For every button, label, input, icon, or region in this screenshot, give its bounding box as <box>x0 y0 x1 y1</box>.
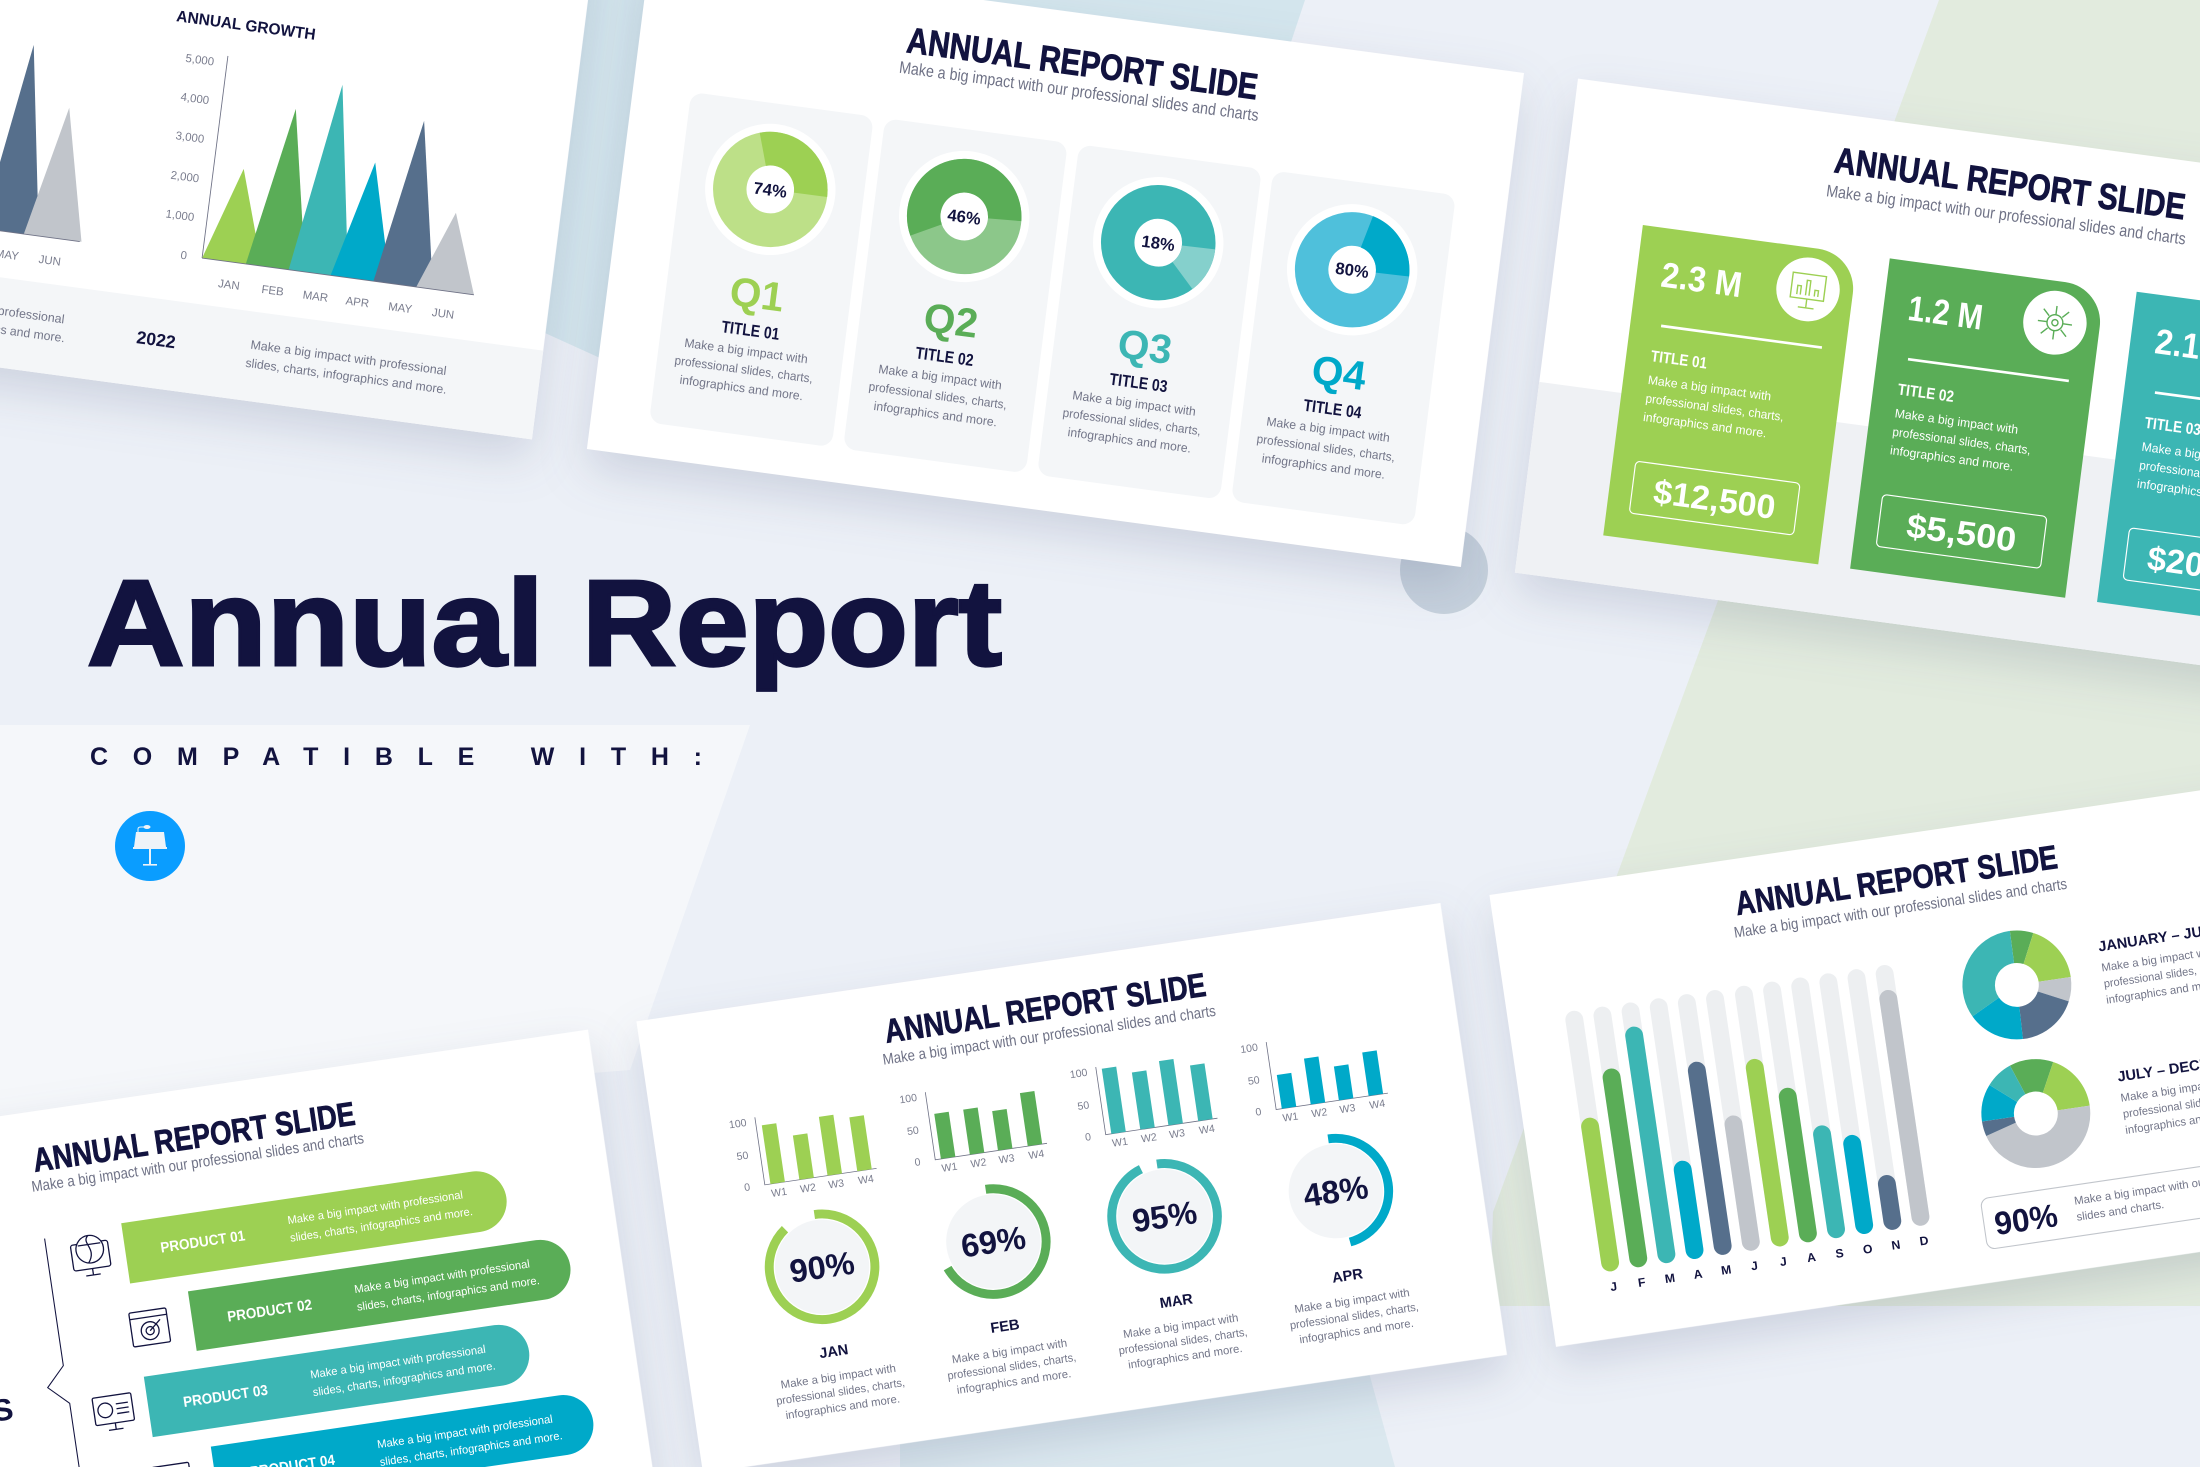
column: FEB: infographics and more. <box>956 1368 1072 1397</box>
chart: right area chart: 1,000 <box>165 208 195 224</box>
card: Q1: infographics and more. <box>679 373 804 403</box>
card: 1.2 M: professional slides, charts, <box>1892 425 2031 457</box>
column: MAR: 0 <box>1084 1131 1092 1144</box>
column: MAR: 95% <box>1130 1194 1200 1239</box>
column: JAN: 90% <box>787 1245 857 1290</box>
text: july to december <box>2116 1050 2200 1137</box>
chart: right area chart: 3,000 <box>175 130 205 146</box>
bracket line <box>26 1238 90 1467</box>
card: 2.1 M <box>2097 292 2200 631</box>
bar: product 03 <box>144 1321 533 1437</box>
column: MAR: MAR <box>1159 1291 1194 1312</box>
card: Q3: professional slides, charts, <box>1062 406 1202 438</box>
slide: annual growth area chart <box>0 0 595 439</box>
card: Q1: Make a big impact with <box>684 336 809 366</box>
column: APR: 0 <box>1255 1106 1262 1119</box>
card: Q2 <box>843 118 1068 473</box>
callout: 90 percent: 90% <box>1992 1197 2060 1242</box>
column: APR: APR <box>1331 1266 1364 1287</box>
slide: product list <box>0 1030 655 1467</box>
column: FEB: Make a big impact with <box>951 1338 1068 1366</box>
icon: network <box>2036 304 2074 342</box>
card: Q4: Q4 <box>1309 346 1369 399</box>
column: APR: W4 <box>1369 1098 1386 1112</box>
column: MAR: professional slides, charts, <box>1118 1327 1248 1357</box>
slide heading: ANNUAL REPORT SLIDE <box>882 967 1208 1051</box>
bar: product 03: PRODUCT 03 <box>182 1383 269 1411</box>
bar: product 02: PRODUCT 02 <box>226 1297 313 1326</box>
column: JAN: W1 <box>770 1186 788 1200</box>
icon: presentation monitor <box>92 1393 136 1432</box>
chart: right area chart: 5,000 <box>185 53 215 69</box>
card: Q4: Make a big impact with <box>1266 414 1391 445</box>
callout: 90 percent <box>1980 1152 2200 1250</box>
slide: yearly bars and donuts <box>1489 777 2200 1347</box>
bar: product 03: Make a big impact with professional <box>310 1344 487 1381</box>
main title: Report <box>582 555 1002 691</box>
column: FEB: W3 <box>998 1152 1015 1166</box>
chart: left area chart <box>0 35 105 271</box>
column: APR: W1 <box>1282 1110 1299 1125</box>
chart: monthly rounded bars: A <box>1693 1267 1704 1282</box>
card: Q3: TITLE 03 <box>1109 370 1169 396</box>
card: 1.2 M: 1.2 M <box>1906 289 1985 338</box>
chart: right area chart: 0 <box>180 250 188 263</box>
card: Q4: infographics and more. <box>1261 451 1386 482</box>
column: JAN: professional slides, charts, <box>775 1377 906 1408</box>
column: APR: professional slides, charts, <box>1289 1301 1420 1332</box>
card: 1.2 M: Make a big impact with <box>1894 406 2019 437</box>
chart: monthly rounded bars: F <box>1637 1275 1647 1290</box>
card: Q4 <box>1231 171 1456 526</box>
bar: product 02: slides, charts, infographics and more. <box>356 1275 540 1314</box>
column: APR: Make a big impact with <box>1294 1287 1410 1316</box>
column: APR: W2 <box>1311 1106 1328 1120</box>
slide: monthly progress <box>636 903 1507 1467</box>
chart: monthly rounded bars: O <box>1862 1242 1873 1257</box>
slide heading: ANNUAL REPORT SLIDE <box>905 19 1260 107</box>
chart: monthly rounded bars: J <box>1750 1259 1759 1273</box>
column: FEB: 50 <box>906 1124 920 1138</box>
bar: product 04 <box>211 1391 597 1467</box>
card: 2.3 M: TITLE 01 <box>1650 348 1708 373</box>
column: JAN: Make a big impact with <box>780 1363 897 1392</box>
slide heading: ANNUAL REPORT SLIDE <box>31 1096 358 1180</box>
card: 2.3 M: professional slides, charts, <box>1645 391 1785 424</box>
column: MAR: W3 <box>1168 1127 1186 1141</box>
column: APR <box>1240 1024 1423 1349</box>
main title <box>87 555 1002 691</box>
card: Q1: professional slides, charts, <box>674 353 814 386</box>
column: JAN: 0 <box>743 1181 751 1194</box>
card: 1.2 M <box>1850 258 2105 598</box>
footer text: left <box>0 286 68 345</box>
donut: january to june <box>1959 927 2075 1043</box>
column: APR: infographics and more. <box>1299 1318 1415 1346</box>
card: 1.2 M: TITLE 02 <box>1897 382 1955 406</box>
column: FEB: professional slides, charts, <box>947 1352 1077 1383</box>
card: 1.2 M: infographics and more. <box>1889 443 2014 474</box>
slide heading: ANNUAL REPORT SLIDE <box>1733 839 2060 923</box>
bar: product 01: slides, charts, infographics and more. <box>289 1206 474 1245</box>
chart: right area chart: MAY <box>387 301 413 316</box>
column: FEB: W4 <box>1028 1148 1045 1162</box>
slide heading <box>25 1095 365 1196</box>
icon: globe monitor <box>69 1233 112 1278</box>
card: Q2: Make a big impact with <box>878 362 1003 393</box>
card: Q2: infographics and more. <box>873 399 998 429</box>
column: FEB: 0 <box>914 1156 922 1169</box>
column: APR: 50 <box>1247 1074 1261 1088</box>
chart: monthly rounded bars: J <box>1779 1254 1788 1269</box>
text: january to june <box>2097 921 2200 1007</box>
heading: annual growth: ANNUAL GROWTH <box>175 8 317 44</box>
column: JAN <box>728 1099 911 1424</box>
column: MAR: W1 <box>1111 1136 1129 1150</box>
footer text: right: Make a big impact with professional <box>250 338 447 378</box>
column: FEB: FEB <box>989 1317 1021 1337</box>
column: JAN: W4 <box>857 1173 875 1187</box>
bar: product 02 <box>188 1236 575 1351</box>
column: APR: 48% <box>1301 1169 1371 1214</box>
icon: keynote <box>115 811 185 881</box>
card: Q3 <box>1037 144 1262 500</box>
column: JAN: infographics and more. <box>785 1393 901 1422</box>
slide: KPI price cards <box>1515 79 2200 691</box>
chart: monthly rounded bars: S <box>1835 1246 1845 1261</box>
slide: quarterly donut cards <box>587 0 1524 567</box>
chart: right area chart <box>157 50 500 324</box>
card: Q1: TITLE 01 <box>720 317 781 344</box>
card: Q3: infographics and more. <box>1067 425 1192 456</box>
chart: right area chart: APR <box>345 295 370 310</box>
slide heading: Make a big impact with our professional slides and charts <box>898 58 1260 125</box>
chart: monthly rounded bars: A <box>1806 1250 1817 1265</box>
card: 2.3 M: Make a big impact with <box>1647 373 1772 404</box>
footer year: 2022 <box>135 327 177 352</box>
main title: Annual <box>87 555 544 691</box>
card: 1.2 M: $5,500 <box>1904 508 2018 559</box>
column: APR: W3 <box>1339 1102 1356 1116</box>
compatible with label: COMPATIBLE WITH: <box>90 743 702 771</box>
column: JAN: W3 <box>828 1177 845 1192</box>
icon: target window <box>129 1308 171 1347</box>
callout: 90 percent: slides and charts. <box>2076 1199 2165 1224</box>
chart: right area chart: JAN <box>217 278 240 293</box>
column: FEB: 100 <box>899 1092 918 1106</box>
chart: monthly rounded bars: M <box>1664 1271 1676 1286</box>
column: JAN: W2 <box>799 1181 817 1196</box>
card: 2.3 M <box>1603 225 1858 564</box>
card: Q2: Q2 <box>921 294 981 347</box>
card: Q4: professional slides, charts, <box>1256 432 1396 464</box>
card: Q2: 46% <box>946 205 982 229</box>
card: Q1: Q1 <box>727 268 787 321</box>
chart: monthly rounded bars: N <box>1890 1238 1901 1253</box>
column: FEB: W1 <box>941 1161 958 1175</box>
chart: monthly rounded bars: M <box>1720 1262 1732 1278</box>
column: MAR: infographics and more. <box>1127 1343 1243 1372</box>
column: MAR: W2 <box>1140 1131 1158 1145</box>
slide heading: Make a big impact with our professional slides and charts <box>882 1003 1217 1069</box>
card: Q1: 74% <box>752 178 788 202</box>
icon: monitor chart <box>1789 272 1827 310</box>
card: Q4: 80% <box>1334 259 1370 282</box>
column: MAR: 50 <box>1077 1099 1090 1113</box>
slide heading <box>1727 838 2068 942</box>
chart: monthly rounded bars <box>1564 964 1934 1295</box>
column: JAN: 100 <box>728 1117 748 1131</box>
chart: left area chart: JUN <box>38 254 61 269</box>
card: Q3: Make a big impact with <box>1072 388 1197 419</box>
bar: product 04: Make a big impact with professional <box>376 1414 554 1451</box>
chart: right area chart: FEB <box>261 284 285 299</box>
bar: product 01: Make a big impact with professional <box>287 1189 464 1227</box>
chart: right area chart: JUN <box>431 307 455 322</box>
chart: right area chart: MAR <box>302 289 329 305</box>
chart: right area chart: 2,000 <box>170 170 200 185</box>
column: MAR: W4 <box>1198 1123 1216 1137</box>
chart: right area chart: 4,000 <box>180 91 210 107</box>
footer text: right: slides, charts, infographics and more. <box>245 356 448 397</box>
column: MAR: 100 <box>1069 1067 1088 1081</box>
card: Q3: 18% <box>1140 232 1176 255</box>
bar: product 03: slides, charts, infographics and more. <box>312 1360 496 1399</box>
card: 2.3 M: 2.3 M <box>1659 256 1744 305</box>
card: Q2: professional slides, charts, <box>868 379 1008 412</box>
column: APR: 100 <box>1240 1042 1259 1056</box>
column: FEB: 69% <box>959 1219 1028 1264</box>
column: JAN: 50 <box>736 1150 749 1163</box>
card: Q2: TITLE 02 <box>914 343 975 370</box>
slide heading <box>876 966 1217 1069</box>
slide heading: Make a big impact with our professional slides and charts <box>1733 876 2068 942</box>
column: FEB: W2 <box>970 1156 987 1171</box>
donut: july to december <box>1975 1052 2097 1175</box>
slide heading: Make a big impact with our professional slides and charts <box>30 1130 365 1196</box>
icon: browser window <box>151 1462 193 1467</box>
card: Q4: TITLE 04 <box>1303 396 1363 423</box>
card: 2.3 M: infographics and more. <box>1642 410 1767 440</box>
chart: monthly rounded bars: D <box>1919 1233 1930 1249</box>
card: 2.3 M: $12,500 <box>1651 474 1777 527</box>
column: MAR: Make a big impact with <box>1122 1312 1239 1341</box>
column: FEB <box>899 1074 1082 1399</box>
chart: monthly rounded bars: J <box>1609 1279 1618 1294</box>
bar: product 01: PRODUCT 01 <box>160 1228 246 1257</box>
card: Q3: Q3 <box>1115 320 1175 373</box>
bar: product 01 <box>121 1167 511 1284</box>
footer text: right <box>245 337 450 397</box>
column: MAR <box>1069 1049 1252 1374</box>
bar: product 02: Make a big impact with professional <box>354 1258 531 1296</box>
column: JAN: JAN <box>818 1342 849 1362</box>
card: Q1 <box>649 92 874 447</box>
